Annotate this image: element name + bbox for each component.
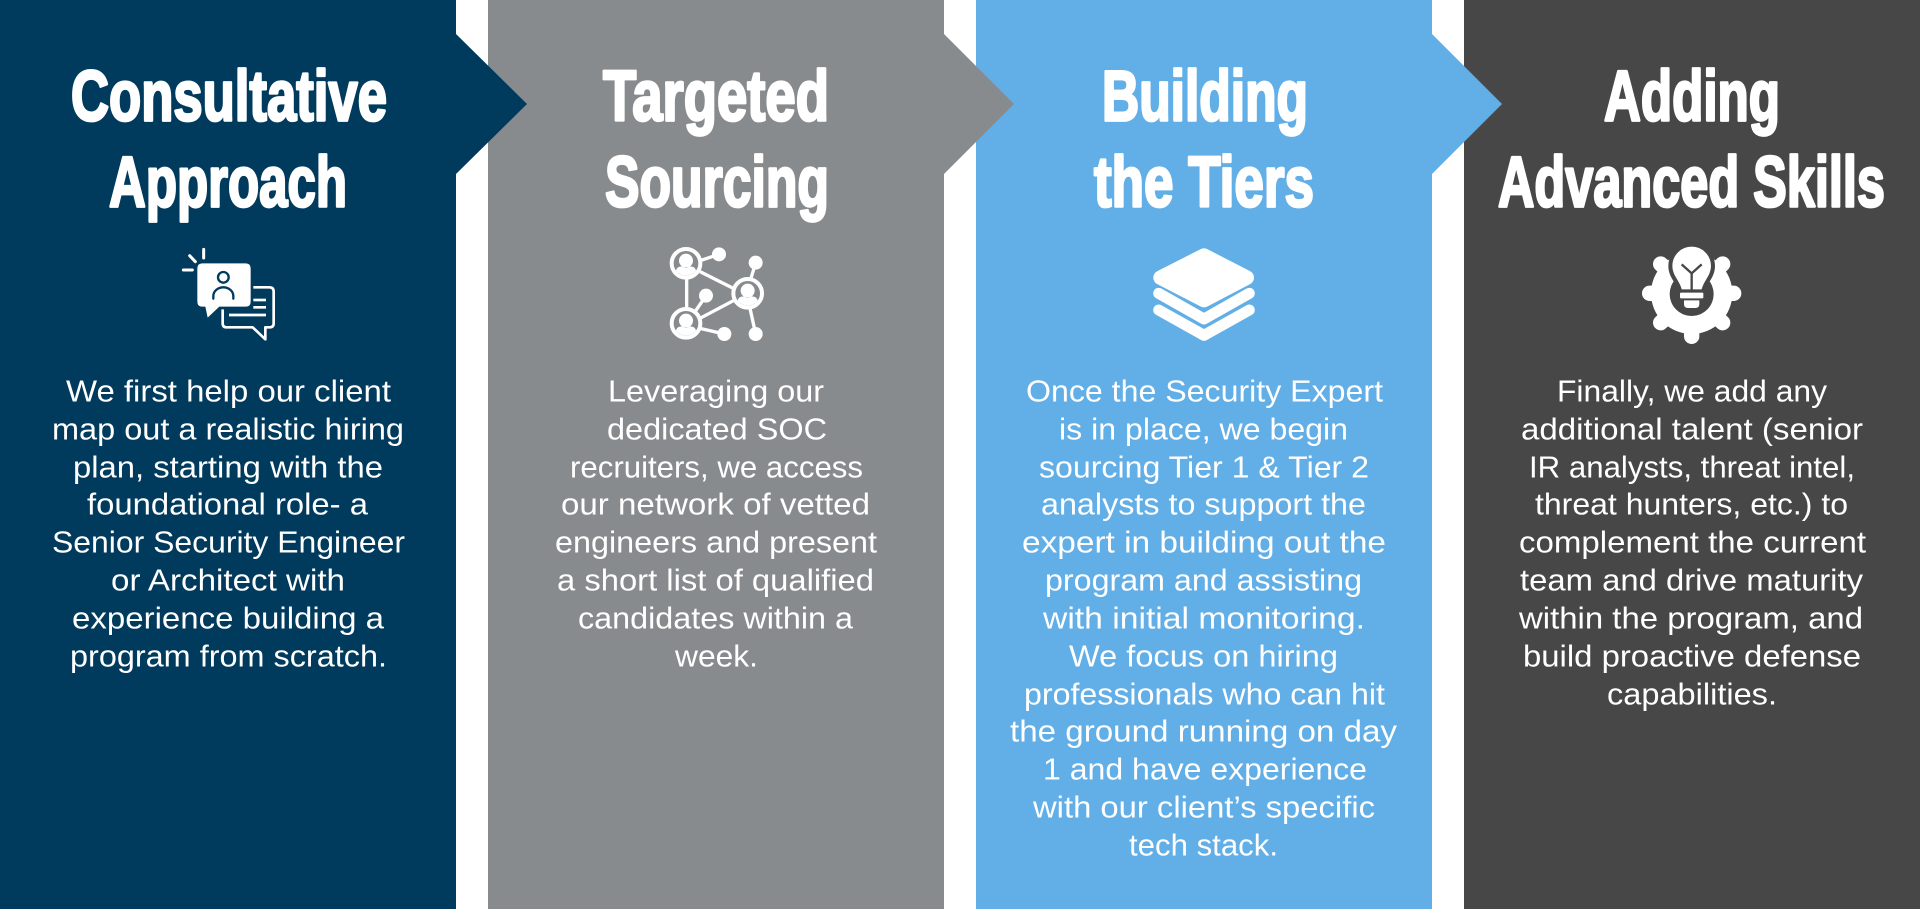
heading: Consultative Approach: Approach xyxy=(109,144,347,222)
panel: Consultative Approach xyxy=(0,0,527,909)
text block: Targeted Sourcing description: recruiters, we access xyxy=(570,451,863,485)
text block: Building the Tiers description: with our client’s specific xyxy=(1032,791,1375,825)
text block: Building the Tiers description: with initial monitoring. xyxy=(1042,602,1365,636)
text block: Building the Tiers description: expert in building out the xyxy=(1022,526,1386,560)
text block: Targeted Sourcing description: candidates within a xyxy=(578,602,853,636)
heading: Targeted Sourcing: Sourcing xyxy=(605,144,829,222)
text block: Building the Tiers description: sourcing Tier 1 & Tier 2 xyxy=(1039,451,1369,485)
heading: Targeted Sourcing xyxy=(603,58,829,222)
icon: stacked layers xyxy=(1159,256,1249,335)
text block: Targeted Sourcing description: dedicated SOC xyxy=(607,413,827,447)
text block: Building the Tiers description: is in place, we begin xyxy=(1059,413,1348,447)
text block: Building the Tiers description: program and assisting xyxy=(1045,564,1362,598)
text block: Consultative Approach description xyxy=(52,375,405,674)
text block: Targeted Sourcing description: Leveraging our xyxy=(608,375,824,409)
text block: Building the Tiers description: the ground running on day xyxy=(1010,715,1398,749)
text block: Adding Advanced Skills description: within the program, and xyxy=(1518,602,1863,636)
text block: Targeted Sourcing description: a short list of qualified xyxy=(557,564,874,598)
text block: Targeted Sourcing description: our network of vetted xyxy=(561,488,870,522)
text block: Consultative Approach description: program from scratch. xyxy=(70,640,387,674)
text block: Adding Advanced Skills description: team and drive maturity xyxy=(1520,564,1864,598)
text block: Targeted Sourcing description: week. xyxy=(674,640,758,674)
text block: Adding Advanced Skills description: build proactive defense xyxy=(1523,640,1861,674)
text block: Adding Advanced Skills description: IR analysts, threat intel, xyxy=(1529,451,1855,485)
heading: Adding Advanced Skills xyxy=(1498,58,1885,222)
heading: Building the Tiers: Building xyxy=(1102,58,1308,136)
text block: Adding Advanced Skills description: additional talent (senior xyxy=(1521,413,1863,447)
heading: Consultative Approach: Consultative xyxy=(71,58,387,136)
panel: Targeted Sourcing xyxy=(488,0,1014,909)
text block: Adding Advanced Skills description: Finally, we add any xyxy=(1557,375,1828,409)
text block: Targeted Sourcing description xyxy=(555,375,878,674)
text block: Consultative Approach description: Senior Security Engineer xyxy=(52,526,405,560)
icon: people network xyxy=(672,247,763,341)
heading: Building the Tiers: the Tiers xyxy=(1094,144,1314,222)
text block: Consultative Approach description: map out a realistic hiring xyxy=(52,413,404,447)
text block: Building the Tiers description: professionals who can hit xyxy=(1024,678,1386,712)
text block: Consultative Approach description: plan, starting with the xyxy=(73,451,383,485)
text block: Building the Tiers description xyxy=(1010,375,1398,863)
text block: Consultative Approach description: or Architect with xyxy=(111,564,345,598)
text block: Targeted Sourcing description: engineers and present xyxy=(555,526,878,560)
text block: Adding Advanced Skills description xyxy=(1518,375,1867,712)
arrow: Consultative Approach shape xyxy=(0,0,527,909)
text block: Adding Advanced Skills description: capabilities. xyxy=(1607,678,1777,712)
heading: Adding Advanced Skills: Adding xyxy=(1604,58,1780,136)
icon: chat bubbles with person xyxy=(183,249,274,339)
text block: Building the Tiers description: 1 and have experience xyxy=(1043,753,1367,787)
text block: Building the Tiers description: tech stack. xyxy=(1129,829,1278,863)
icon: gear with lightbulb xyxy=(1650,245,1734,336)
panel: Building the Tiers xyxy=(976,0,1502,909)
heading: Targeted Sourcing: Targeted xyxy=(603,58,829,136)
text block: Consultative Approach description: We first help our client xyxy=(66,375,392,409)
arrow: Targeted Sourcing shape xyxy=(488,0,1014,909)
heading: Consultative Approach xyxy=(71,58,387,222)
text block: Consultative Approach description: foundational role- a xyxy=(87,488,368,522)
text block: Consultative Approach description: experience building a xyxy=(72,602,384,636)
text block: Adding Advanced Skills description: threat hunters, etc.) to xyxy=(1535,488,1848,522)
text block: Building the Tiers description: Once the Security Expert xyxy=(1026,375,1384,409)
text block: Adding Advanced Skills description: complement the current xyxy=(1519,526,1867,560)
arrow: Building the Tiers shape xyxy=(976,0,1502,909)
text block: Building the Tiers description: analysts to support the xyxy=(1041,488,1366,522)
heading: Building the Tiers xyxy=(1094,58,1314,222)
text block: Building the Tiers description: We focus on hiring xyxy=(1069,640,1338,674)
panel: Adding Advanced Skills xyxy=(1464,0,1920,909)
